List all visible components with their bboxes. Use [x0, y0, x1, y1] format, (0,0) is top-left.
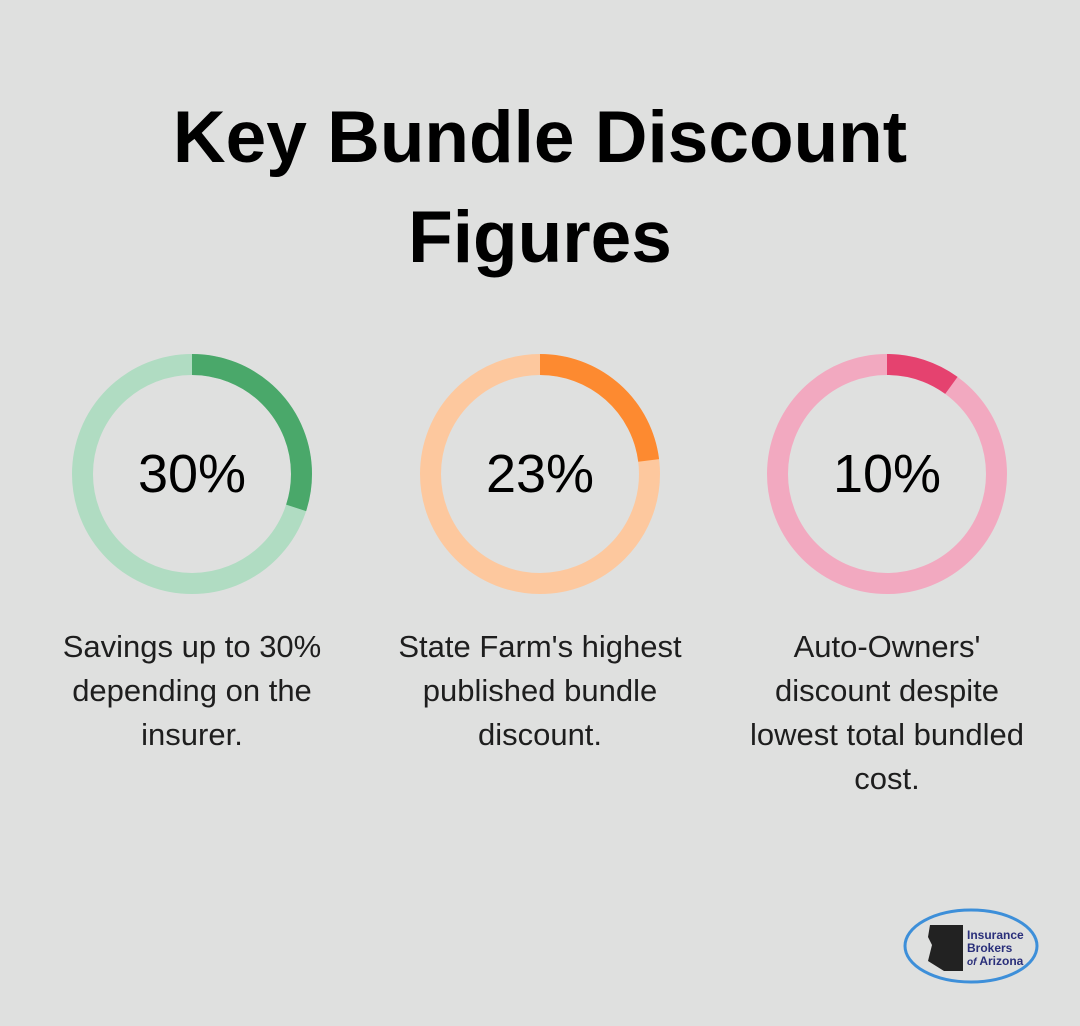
donut: 10%: [778, 364, 996, 584]
logo: [904, 908, 1038, 984]
caption: 30%: Savings up to 30% depending on the insurer.: [63, 629, 321, 752]
logo: of Arizona: [967, 954, 1024, 968]
donut: 30%: [82, 364, 302, 584]
logo: Brokers: [967, 941, 1013, 955]
donut: 30%: 30%: [138, 444, 246, 504]
donut: 10%: 10%: [833, 444, 941, 504]
donut: 23%: 23%: [486, 444, 594, 504]
title: [173, 97, 907, 278]
logo: Insurance: [967, 928, 1024, 942]
title: Figures: [408, 197, 672, 278]
title: Key Bundle Discount: [173, 97, 907, 178]
caption: 10%: Auto-Owners' discount despite lowest total bundled cost.: [750, 629, 1024, 796]
caption: 23%: State Farm's highest published bundle discount.: [398, 629, 682, 752]
donut: 23%: [430, 364, 650, 584]
